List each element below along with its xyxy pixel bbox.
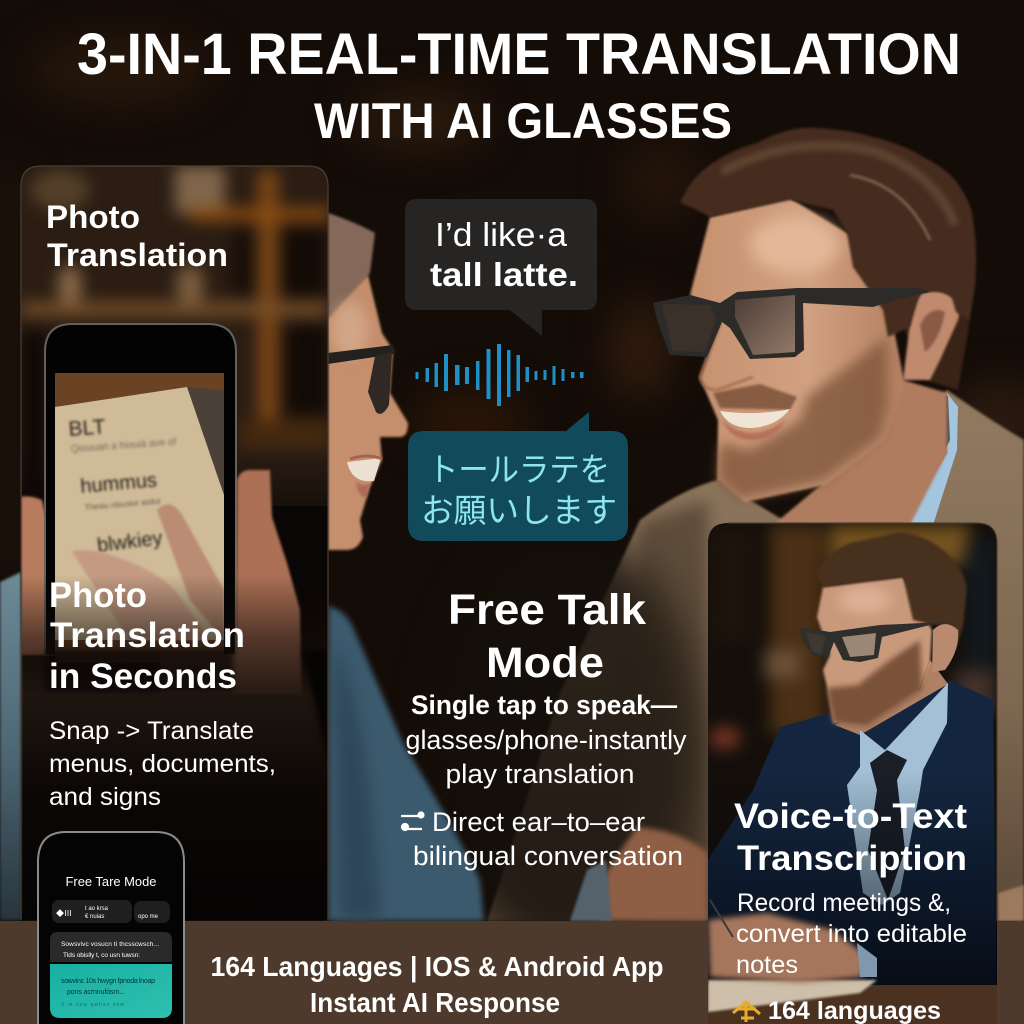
woman glasses xyxy=(328,345,394,414)
text block: free talk mode: glasses/phone-instantly xyxy=(406,725,687,755)
small portrait ear xyxy=(932,624,958,672)
band text: 164 Languages | IOS & Android App xyxy=(210,951,664,982)
text block: free talk mode: Direct ear–to–ear xyxy=(432,807,645,837)
panel: photo translation xyxy=(21,166,330,920)
text block: voice-to-text: Record meetings &, xyxy=(737,889,951,917)
man's head with AI glasses xyxy=(653,128,976,525)
small phone: free talk app xyxy=(38,832,184,1024)
source text card: Tlds obislly t, co usn tuwsn: xyxy=(63,952,140,959)
text block: voice-to-text: convert into editable xyxy=(736,920,967,948)
moustache xyxy=(713,384,797,410)
blurred panel background xyxy=(709,525,997,749)
man's hand and cuff xyxy=(570,827,708,921)
phone screen: menu photo: hummus xyxy=(80,469,158,498)
phone screen: menu photo: Qiouuan a hiouiá ave of xyxy=(70,437,177,455)
dark centre shading xyxy=(430,530,700,950)
panel border highlights xyxy=(21,166,997,921)
man's jacket and torso xyxy=(328,390,1024,950)
hair back xyxy=(870,280,975,390)
text block: photo translation in seconds xyxy=(49,576,276,811)
sleeve at right edge xyxy=(998,885,1024,921)
phone screen: menu photo: blwkiey xyxy=(96,527,164,557)
ear xyxy=(903,291,959,380)
woman, partly hidden by panel xyxy=(328,213,408,550)
text block: voice-to-text: Voice-to-Text xyxy=(734,797,967,836)
translation card: sowvinc 10s hwygn fpnoda lnoap xyxy=(61,978,155,985)
speech bubble: English: I’d like·a xyxy=(435,216,568,253)
icon: switch arrows xyxy=(401,812,424,830)
neck xyxy=(773,380,947,525)
woman smile xyxy=(347,456,382,498)
speech bubble: Japanese: お願いします xyxy=(421,492,617,529)
glasses xyxy=(653,288,930,359)
phone screen: menu photo xyxy=(55,373,224,663)
title: WITH AI GLASSES xyxy=(314,93,732,149)
text block: free talk mode xyxy=(401,586,687,871)
nose xyxy=(700,323,753,390)
face xyxy=(690,198,905,502)
speech bubble: English: tall latte. xyxy=(430,256,578,293)
blurred cafe shelves xyxy=(22,166,328,506)
text block: voice-to-text: Transcription xyxy=(737,839,967,878)
icon: sound waveform xyxy=(416,344,584,406)
head and glasses xyxy=(800,532,967,727)
text block: free talk mode: bilingual conversation xyxy=(413,841,683,871)
text block: voice-to-text xyxy=(734,797,967,979)
smile with teeth xyxy=(720,409,790,440)
navy suit xyxy=(708,680,996,985)
text block: photo translation in seconds: in Seconds xyxy=(49,657,237,696)
band text xyxy=(210,951,664,1018)
man's shirt collar xyxy=(905,393,958,525)
small phone: free talk app: Free Tare Mode xyxy=(66,874,156,889)
text block: photo translation in seconds: Snap -> Translate xyxy=(49,717,254,745)
text block: free talk mode: Free Talk xyxy=(448,586,646,634)
phone screen: menu photo: BLT xyxy=(68,415,106,441)
phone screen: menu photo: Thesiu ntsusiur asdut xyxy=(84,496,162,512)
band text: Instant AI Response xyxy=(310,987,560,1018)
text block: free talk mode: Mode xyxy=(486,639,604,687)
right hand holding phone xyxy=(161,468,302,694)
woman's blue shirt sleeve xyxy=(328,606,484,921)
translation card: pons acrnnufósrn... xyxy=(67,989,125,996)
left edge: woman's blue clothing xyxy=(0,572,21,920)
small portrait glasses xyxy=(800,622,942,662)
language selector: ◆Ⅲ xyxy=(56,909,72,918)
speech bubble: English xyxy=(405,199,597,336)
neck xyxy=(835,660,948,735)
fade over lower phone and hand xyxy=(21,575,328,695)
text block: photo translation in seconds: Photo xyxy=(49,576,147,615)
smartphone with menu xyxy=(45,324,236,663)
text block: free talk mode: Single tap to speak— xyxy=(411,690,677,720)
bottom band xyxy=(0,921,1024,1024)
translation card xyxy=(50,964,172,1018)
source text card xyxy=(50,932,172,962)
text block: free talk mode: play translation xyxy=(446,759,634,789)
speech bubble: Japanese: トールラテを xyxy=(428,451,610,488)
heading: photo translation: Photo xyxy=(46,199,140,235)
woman hair xyxy=(328,213,375,325)
source text card: Sowsvivc vosucn ti thcsscwsch... xyxy=(61,941,159,948)
panel: voice-to-text transcription xyxy=(708,523,997,1024)
pointing fingers xyxy=(157,504,224,640)
speech bubble: Japanese xyxy=(408,412,628,541)
forehead highlight xyxy=(750,217,840,273)
shirt collar xyxy=(847,683,948,905)
heading: photo translation xyxy=(46,199,228,273)
language selector: t ao krsa xyxy=(85,906,109,912)
language selector: opo me xyxy=(138,914,159,920)
small portrait hair xyxy=(815,532,967,650)
text block: voice-to-text: notes xyxy=(736,951,798,979)
text block: photo translation in seconds: and signs xyxy=(49,783,161,811)
language selector: € nuias xyxy=(85,914,104,920)
text block: photo translation in seconds: menus, documents, xyxy=(49,750,276,778)
beard xyxy=(717,337,888,500)
translation card: k m ssw qwhss snw xyxy=(62,1002,124,1008)
hair xyxy=(680,128,976,337)
heading: photo translation: Translation xyxy=(47,237,228,273)
woman face xyxy=(328,275,408,550)
writing hand and notebook xyxy=(708,900,997,1024)
dark overlay xyxy=(708,770,997,990)
icon: language glyph xyxy=(733,1002,760,1022)
text block: photo translation in seconds: Translation xyxy=(50,616,245,655)
striped tie xyxy=(868,750,907,900)
left hand behind phone xyxy=(22,494,44,656)
title: 3-IN-1 REAL-TIME TRANSLATION xyxy=(77,22,961,87)
language selector xyxy=(52,900,170,923)
title xyxy=(77,22,961,149)
